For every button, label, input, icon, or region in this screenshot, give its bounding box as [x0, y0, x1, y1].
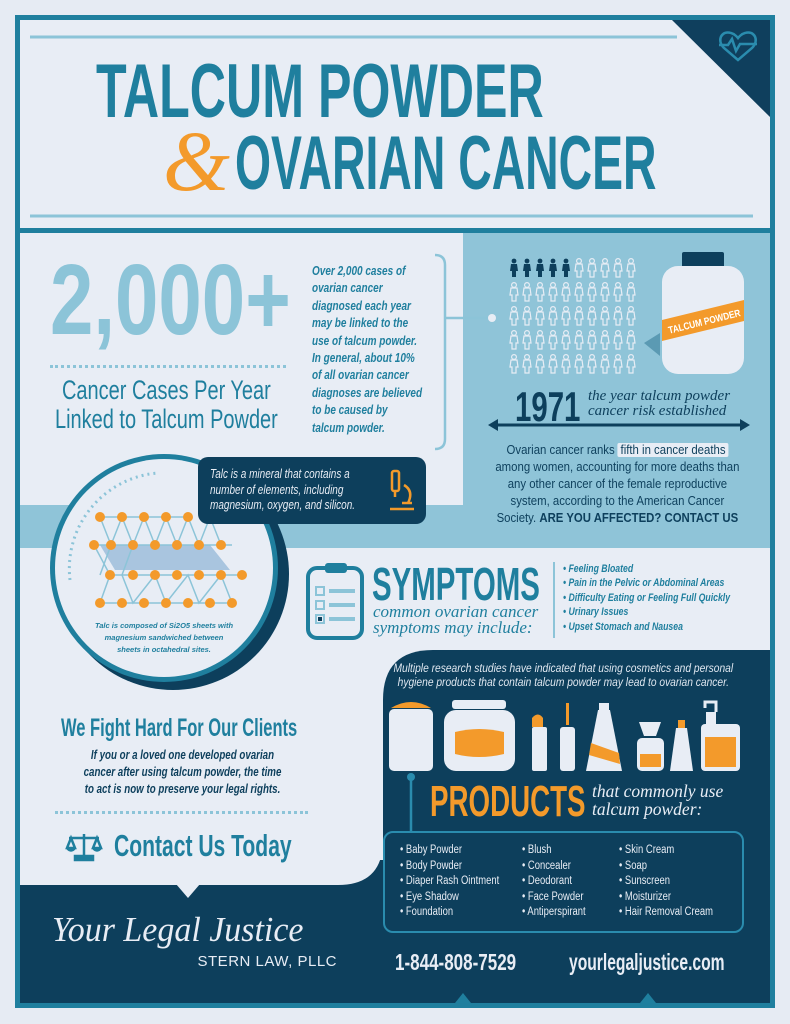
products heading: [407, 773, 723, 831]
symptoms section: [306, 558, 730, 640]
products list box: • Hair Removal Cream: [619, 906, 713, 918]
firm subtitle: STERN LAW, PLLC: [198, 953, 337, 970]
people grid: [509, 258, 636, 374]
icon: clipboard: [306, 563, 364, 640]
symptoms section: • Feeling Bloated: [563, 563, 633, 575]
talc molecule circle: sheets in octahedral sites.: [117, 645, 211, 654]
we fight paragraph: [84, 747, 282, 796]
products list box: • Eye Shadow: [400, 891, 459, 903]
ovarian ranking paragraph: Ovarian cancer ranks fifth in cancer deaths: [507, 443, 726, 457]
bracket connector: [435, 254, 496, 450]
we fight paragraph: If you or a loved one developed ovarian: [91, 747, 274, 762]
we fight paragraph: cancer after using talcum powder, the time: [84, 764, 281, 779]
products list box: • Moisturizer: [619, 891, 671, 903]
products heading: that commonly use talcum powder:: [592, 781, 723, 819]
stat: 2,000+: 2,000+: [50, 244, 291, 356]
title: TALCUM POWDER: [96, 49, 544, 134]
we fight paragraph: to act is now to preserve your legal rights.: [85, 781, 280, 796]
symptoms section: common ovarian cancer symptoms may include:: [373, 602, 538, 637]
products list box: [383, 831, 744, 933]
stat paragraph: ovarian cancer: [312, 281, 383, 295]
icon: heart pulse: [719, 32, 757, 60]
products list box: • Antiperspirant: [522, 906, 586, 918]
products list box: • Concealer: [522, 860, 571, 872]
1971 timeline: 1971: [515, 383, 580, 430]
products list box: • Deodorant: [522, 875, 572, 887]
contact us today: Contact Us Today: [114, 828, 292, 863]
ovarian ranking paragraph: system, according to the American Cancer: [511, 494, 724, 508]
products list box: • Blush: [522, 844, 552, 856]
icon: talcum powder bottle: [644, 252, 744, 374]
1971 timeline: [488, 383, 750, 431]
ovarian ranking paragraph: [495, 443, 739, 525]
1971 timeline: the year talcum powder cancer risk established: [588, 388, 730, 419]
we fight heading: We Fight Hard For Our Clients: [61, 714, 297, 742]
talc callout box: number of elements, including: [210, 482, 343, 496]
talc callout box: [198, 457, 426, 524]
symptoms section: • Pain in the Pelvic or Abdominal Areas: [563, 577, 724, 589]
products list box: • Baby Powder: [400, 844, 462, 856]
stat paragraph: Over 2,000 cases of: [312, 264, 405, 278]
stat paragraph: In general, about 10%: [312, 351, 415, 365]
products list box: • Soap: [619, 860, 647, 872]
talc callout box: Talc is a mineral that contains a: [210, 467, 350, 481]
stat paragraph: diagnosed each year: [312, 299, 411, 313]
talc molecule circle: magnesium sandwiched between: [105, 633, 224, 642]
talc molecule circle: [50, 454, 289, 690]
icon: scales: [65, 834, 103, 862]
website: yourlegaljustice.com: [569, 949, 725, 975]
talc molecule circle: Talc is composed of Si2O5 sheets with: [95, 621, 233, 630]
symptoms section: SYMPTOMS: [372, 558, 540, 610]
symptoms section: • Urinary Issues: [563, 606, 628, 618]
stat paragraph: may be linked to the: [312, 316, 408, 330]
ovarian ranking paragraph: among women, accounting for more deaths than: [495, 460, 739, 474]
ovarian ranking paragraph: Society. ARE YOU AFFECTED? CONTACT US: [497, 511, 738, 525]
stat caption: Cancer Cases Per Year: [62, 375, 271, 405]
research statement: Multiple research studies have indicated that using cosmetics and personal: [393, 663, 733, 675]
products list box: • Face Powder: [522, 891, 583, 903]
stat paragraph: [312, 264, 422, 435]
phone: 1-844-808-7529: [395, 949, 516, 975]
icon: microscope: [390, 470, 414, 510]
stat paragraph: of all ovarian cancer: [312, 368, 409, 382]
research statement: hygiene products that contain talcum powder may lead to ovarian cancer.: [398, 677, 729, 689]
products list box: • Body Powder: [400, 860, 462, 872]
products list box: • Sunscreen: [619, 875, 670, 887]
stat caption: [55, 375, 278, 434]
symptoms section: • Difficulty Eating or Feeling Full Quickly: [563, 592, 730, 604]
products list box: • Diaper Rash Ointment: [400, 875, 499, 887]
symptoms section: • Upset Stomach and Nausea: [563, 621, 683, 633]
research statement: [393, 663, 734, 689]
stat caption: Linked to Talcum Powder: [55, 404, 278, 434]
ovarian ranking paragraph: any other cancer of the female reproductive: [508, 477, 727, 491]
products list box: • Foundation: [400, 906, 453, 918]
stat paragraph: talcum powder.: [312, 421, 385, 435]
stat paragraph: use of talcum powder.: [312, 334, 417, 348]
talc callout box: magnesium, oxygen, and silicon.: [210, 498, 355, 512]
firm name: Your Legal Justice: [52, 910, 304, 949]
stat paragraph: to be caused by: [312, 403, 388, 417]
products list box: • Skin Cream: [619, 844, 674, 856]
subtitle ampersand: &: [163, 113, 230, 209]
subtitle: OVARIAN CANCER: [235, 121, 657, 206]
product icons: [389, 700, 740, 771]
stat paragraph: diagnoses are believed: [312, 386, 422, 400]
products heading: PRODUCTS: [430, 777, 586, 826]
